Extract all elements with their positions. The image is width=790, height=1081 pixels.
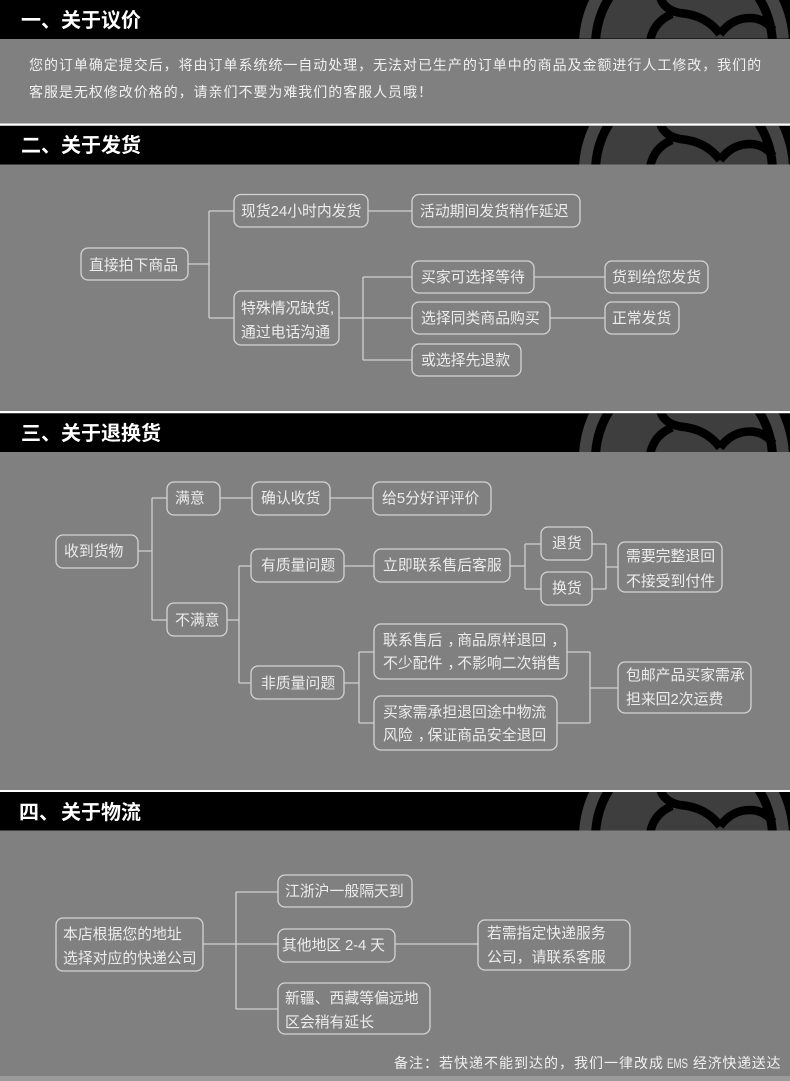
box: out of stock xyxy=(234,291,339,345)
box: next day xyxy=(278,875,412,907)
box: non-quality problem: 非质量问题 xyxy=(261,675,335,692)
box: goods received xyxy=(56,535,138,568)
box: remote regions xyxy=(278,983,430,1034)
box: place order xyxy=(81,248,188,280)
section 2 header: 二、关于发货 xyxy=(21,133,141,157)
box: wait xyxy=(412,261,534,293)
connectors: logistics xyxy=(203,892,478,1009)
box: remote regions: 区会稍有延长 xyxy=(285,1014,374,1031)
box: out of stock: 特殊情况缺货, xyxy=(241,300,334,317)
section 1 header xyxy=(0,0,790,39)
connectors: shipping xyxy=(188,211,605,360)
box: confirm receipt xyxy=(252,482,330,515)
box: buyer bears risk: 买家需承担退回途中物流 xyxy=(383,704,546,721)
box: return as is xyxy=(374,624,567,679)
box: similar goods xyxy=(412,302,550,334)
section 2 flowchart xyxy=(81,194,708,376)
section 1 header: 一、关于议价 xyxy=(21,9,141,32)
box: normal shipping: 正常发货 xyxy=(612,310,672,327)
box: specify courier: 公司，请联系客服 xyxy=(487,949,606,966)
box: exchange xyxy=(541,572,592,605)
section 3 flowchart xyxy=(56,482,751,750)
box: promotion delay xyxy=(412,194,580,227)
box: contact service: 立即联系售后客服 xyxy=(383,557,502,574)
box: contact service xyxy=(374,549,510,582)
box: other regions: 其他地区 2-4 天 xyxy=(282,937,385,954)
box: buyer bears risk xyxy=(374,696,557,750)
section 3 header xyxy=(0,411,790,452)
section 4 header xyxy=(0,790,790,830)
box: not satisfied: 不满意 xyxy=(175,611,220,629)
box: specify courier xyxy=(478,920,630,970)
box: five star review xyxy=(373,482,491,515)
box: satisfied xyxy=(167,482,220,515)
footer note: 备注：若快递不能到达的，我们一律改成 xyxy=(394,1055,664,1071)
box: satisfied: 满意 xyxy=(175,489,205,507)
box: refund first xyxy=(412,344,521,376)
box: next day: 江浙沪一般隔天到 xyxy=(285,883,404,900)
box: similar goods: 选择同类商品购买 xyxy=(421,310,540,327)
box: ship on arrival xyxy=(605,261,708,293)
box: postage: 担来回2次运费 xyxy=(626,691,723,708)
box: store selects courier: 选择对应的快递公司 xyxy=(63,949,197,967)
box: remote regions: 新疆、西藏等偏远地 xyxy=(285,989,419,1007)
box: non-quality problem xyxy=(251,666,344,699)
section 1 body text: 您的订单确定提交后，将由订单系统统一自动处理，无法对已生产的订单中的商品及金额进行人工修改，我们的 xyxy=(29,57,762,73)
box: in stock: 现货24小时内发货 xyxy=(241,203,362,220)
box: promotion delay: 活动期间发货稍作延迟 xyxy=(420,203,569,220)
box: postage xyxy=(618,662,751,713)
box: refund first: 或选择先退款 xyxy=(421,352,510,369)
box: in stock xyxy=(234,194,368,227)
box: full return: 不接受到付件 xyxy=(626,573,715,590)
box: full return: 需要完整退回 xyxy=(626,548,715,565)
box: normal shipping xyxy=(605,302,679,334)
box: specify courier: 若需指定快递服务 xyxy=(487,925,606,942)
box: return: 退货 xyxy=(552,535,582,552)
box: confirm receipt: 确认收货 xyxy=(261,490,321,507)
box: out of stock: 通过电话沟通 xyxy=(241,324,330,341)
box: store selects courier: 本店根据您的地址 xyxy=(63,926,182,943)
box: postage: 包邮产品买家需承 xyxy=(626,667,745,684)
section 4 header: 四、关于物流 xyxy=(19,801,141,824)
box: exchange: 换货 xyxy=(552,580,582,597)
box: return as is: 不少配件 ，不影响二次销售 xyxy=(383,655,561,672)
section 1 body text xyxy=(29,57,762,100)
box: return as is: 联系售后 ，商品原样退回 ， xyxy=(383,632,566,649)
footer note: EMS xyxy=(667,1055,688,1071)
box: store selects courier xyxy=(56,918,203,971)
box: wait: 买家可选择等待 xyxy=(421,268,525,286)
connectors: returns xyxy=(138,498,618,723)
footer note: 经济快递送达 xyxy=(693,1055,781,1071)
box: quality problem xyxy=(251,549,344,582)
box: return xyxy=(541,527,592,560)
section 3 header: 三、关于退换货 xyxy=(21,421,161,445)
section 1 body text: 客服是无权修改价格的，请亲们不要为难我们的客服人员哦！ xyxy=(29,84,433,100)
box: ship on arrival: 货到给您发货 xyxy=(612,269,701,286)
section 4 flowchart xyxy=(56,875,630,1034)
box: buyer bears risk: 风险 ，保证商品安全退回 xyxy=(383,726,546,744)
box: quality problem: 有质量问题 xyxy=(261,557,335,574)
section 2 header xyxy=(0,124,790,164)
box: five star review: 给5分好评评价 xyxy=(382,490,479,507)
box: not satisfied xyxy=(167,603,227,636)
footer note xyxy=(394,1055,781,1071)
box: place order: 直接拍下商品 xyxy=(89,257,178,274)
box: goods received: 收到货物 xyxy=(64,543,124,560)
box: full return xyxy=(618,542,722,592)
bottom line xyxy=(0,1076,790,1081)
box: other regions xyxy=(278,929,395,962)
